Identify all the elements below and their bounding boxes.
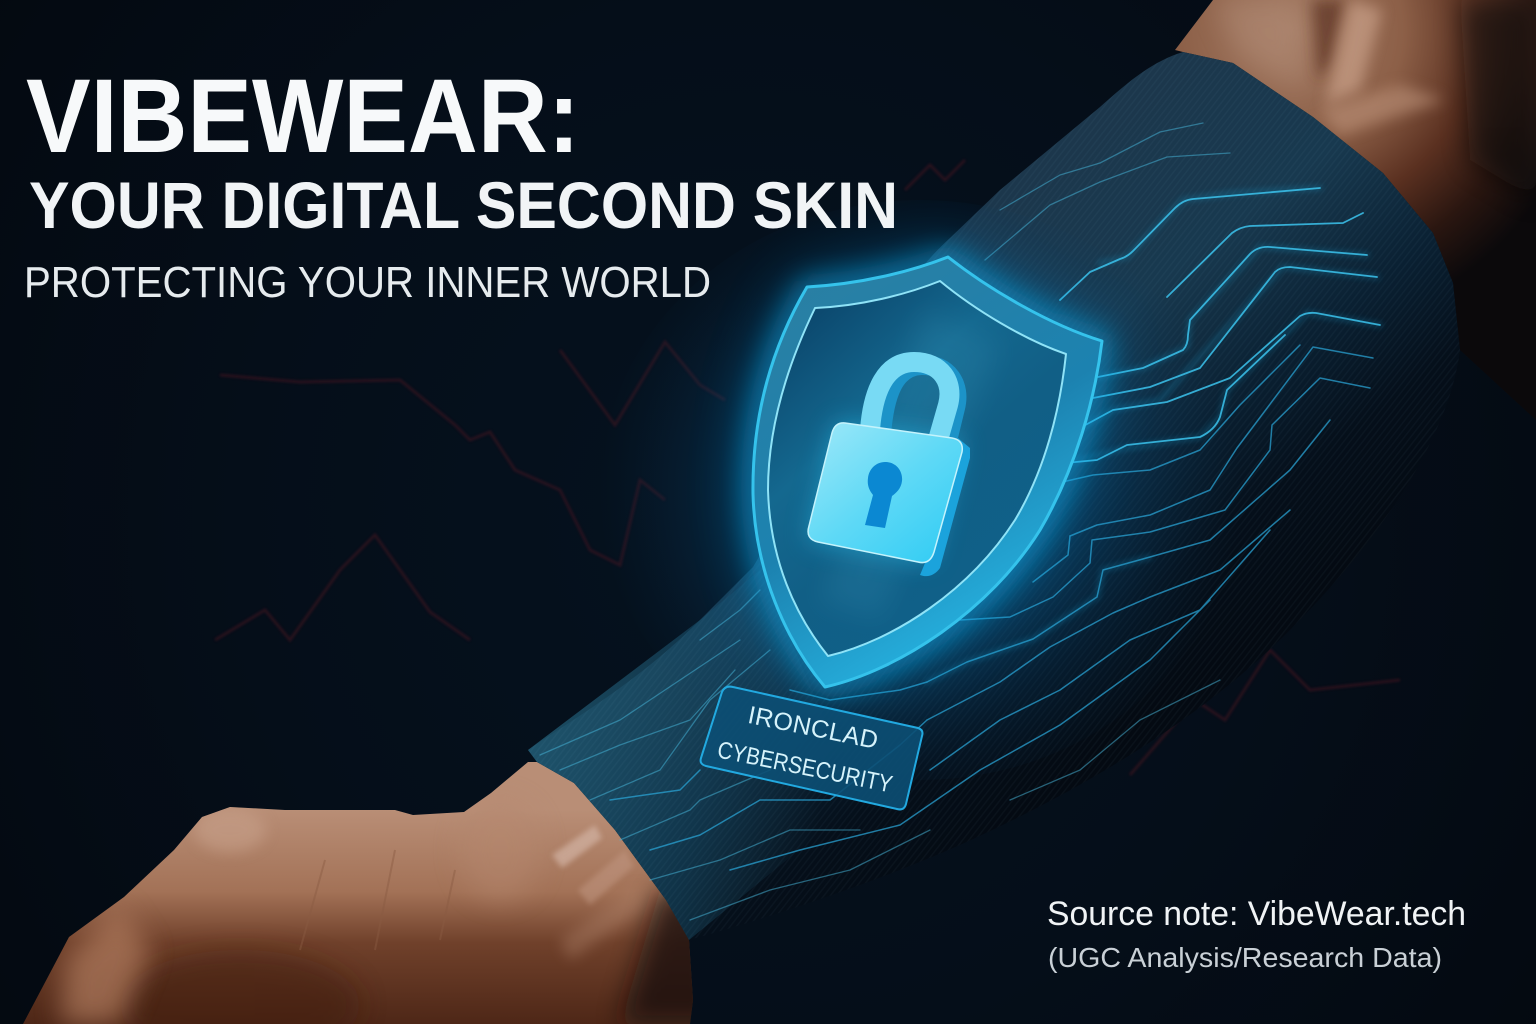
shield with padlock [753,257,1102,687]
glow on the sleeve around shield [600,200,1240,780]
badge: ironclad cybersecurity [701,687,922,809]
shield near glow [753,257,1102,687]
badge line 1: IRONCLAD [746,701,880,755]
upper arm skin [1150,0,1536,430]
padlock shackle [870,362,956,445]
padlock glow [808,423,962,563]
source detail: (UGC Analysis/Research Data) [1048,942,1442,973]
subtitle: YOUR DIGITAL SECOND SKIN [29,168,898,242]
tagline: PROTECTING YOUR INNER WORLD [24,258,711,307]
source note: Source note: VibeWear.tech [1047,895,1466,933]
padlock body side [920,438,970,576]
padlock body [808,423,962,563]
shield outer rim [753,257,1102,687]
hand [23,762,693,1024]
shield light streak [820,310,1000,620]
title: VIBEWEAR: [26,58,580,175]
keyhole [865,462,902,528]
shield inner panel [768,281,1066,656]
compression sleeve [528,52,1460,940]
badge line 2: CYBERSECURITY [715,737,895,798]
faint red pulse lines in background [215,160,1400,775]
shield glow [753,257,1102,687]
glowing circuit lines on sleeve [540,123,1380,920]
